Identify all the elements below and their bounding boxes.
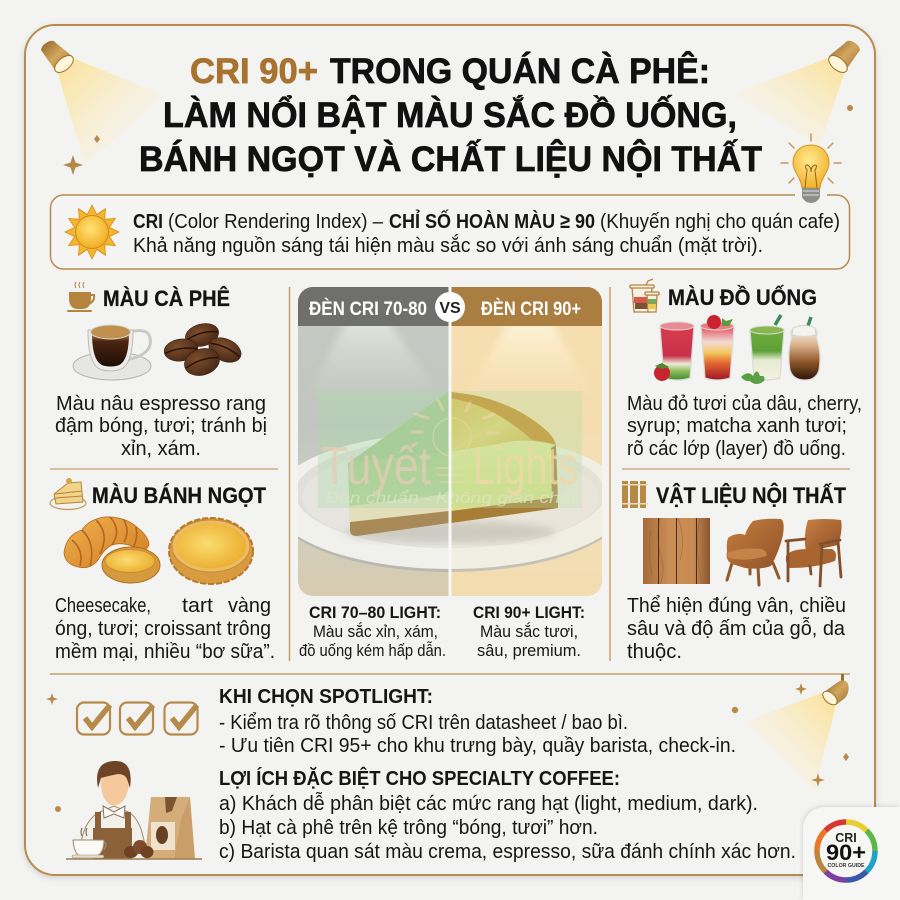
text block: choosing a spotlight [219, 686, 736, 757]
icon: bottom-left sparkles [46, 693, 61, 812]
icon: espresso cup [73, 325, 151, 380]
icon: small egg tart [102, 547, 160, 583]
icon: top-left sparkles [63, 135, 100, 175]
comparison image: Tuyết [321, 436, 431, 496]
VS badge: VS [439, 300, 461, 317]
pastry description [55, 594, 275, 663]
drink description: Màu đỏ tươi của dâu, cherry, [627, 392, 862, 415]
coffee description: xỉn, xám. [121, 437, 201, 460]
text block: choosing a spotlight: - Ưu tiên CRI 95+ cho khu trưng bày, quầy barista, check-in. [219, 735, 736, 757]
coffee description [55, 392, 267, 460]
CRI definition text: (Khuyến nghị cho quán cafe) [600, 210, 840, 233]
CRI definition text: Khả năng nguồn sáng tái hiện màu sắc so với ánh sáng chuẩn (mặt trời). [133, 234, 763, 257]
heading: interior materials: VẬT LIỆU NỘI THẤT [656, 483, 847, 508]
interior description: thuộc. [627, 640, 682, 663]
icon: croissant [64, 517, 149, 568]
icon: wood panel [643, 518, 710, 584]
panel: coffee colour [55, 282, 267, 460]
icon: large egg tart [169, 518, 253, 584]
title: CRI 90+ [190, 52, 318, 91]
caption: CRI 90+ [473, 604, 585, 660]
title [139, 51, 762, 179]
icon: small cake slice [50, 478, 86, 510]
label: CRI 70-80 lamp: ĐÈN CRI 70-80 [309, 298, 427, 320]
icon: three checkboxes [77, 702, 198, 734]
icon: leather armchair [727, 519, 784, 585]
drink description [627, 392, 862, 460]
title: BÁNH NGỌT VÀ CHẤT LIỆU NỘI THẤT [139, 139, 762, 179]
badge: CRI 90+ colour guide [803, 807, 900, 900]
comparison image: Đèn chuẩn - Không gian chất [325, 489, 577, 507]
interior description: Thể hiện đúng vân, chiều [627, 594, 846, 617]
panel: cheesecake comparison [298, 287, 602, 660]
CRI definition text: CRI [133, 210, 163, 233]
icon: bottom-right spotlight [745, 674, 849, 790]
icon: coffee beans [163, 320, 245, 380]
icon: layered drinks [654, 315, 820, 384]
badge: CRI 90+ colour guide: CRI [835, 831, 857, 845]
pastry description: vàng [228, 594, 271, 617]
icon: decorative dot top-right [847, 105, 853, 111]
text block: choosing a spotlight: - Kiểm tra rõ thông số CRI trên datasheet / bao bì. [219, 712, 628, 734]
caption: CRI 90+: Màu sắc tươi, [480, 622, 578, 641]
icon: light bulb [781, 134, 841, 203]
CRI definition text: CHỈ SỐ HOÀN MÀU ≥ 90 [389, 209, 595, 233]
heading: pastry colour: MÀU BÁNH NGỌT [92, 483, 267, 508]
icon: small wood planks [622, 481, 648, 508]
caption: CRI 70-80: đồ uống kém hấp dẫn. [299, 641, 446, 660]
comparison image [298, 287, 602, 596]
label: CRI 90+ lamp: ĐÈN CRI 90+ [481, 298, 581, 320]
pastry description: tart [182, 594, 213, 617]
pastry description: óng, tươi; croissant trông [55, 617, 271, 640]
CRI definition text [133, 209, 840, 257]
interior description: sâu và độ ấm của gỗ, da [627, 617, 846, 640]
VS badge [435, 292, 465, 322]
caption: CRI 70-80: CRI 70–80 LIGHT: [309, 604, 441, 622]
text block: specialty coffee benefits [219, 766, 796, 863]
text block: choosing a spotlight: KHI CHỌN SPOTLIGHT: [219, 686, 433, 708]
badge: CRI 90+ colour guide: COLOR GUIDE [828, 863, 865, 869]
icon: sun [65, 205, 119, 259]
pastry description: mềm mại, nhiều “bơ sữa”. [55, 640, 275, 663]
text block: specialty coffee benefits: b) Hạt cà phê trên kệ trông “bóng, tươi” hơn. [219, 817, 598, 839]
title: LÀM NỔI BẬT MÀU SẮC ĐỒ UỐNG, [163, 95, 737, 135]
caption: CRI 90+: sâu, premium. [477, 642, 581, 660]
title: TRONG QUÁN CÀ PHÊ: [330, 51, 710, 91]
panel: pastry colour [50, 478, 275, 663]
heading: coffee colour: MÀU CÀ PHÊ [103, 286, 230, 311]
pastry description: Cheesecake, [55, 594, 151, 617]
comparison image: Lights [473, 436, 578, 496]
panel: CRI definition [50, 195, 850, 269]
heading: drink colour: MÀU ĐỒ UỐNG [668, 284, 817, 310]
drink description: syrup; matcha xanh tươi; [627, 414, 847, 437]
icon: wooden-arm chair [786, 519, 842, 586]
badge: CRI 90+ colour guide: 90+ [826, 840, 866, 865]
icon: small coffee cup [67, 282, 94, 312]
interior description [627, 594, 846, 663]
panel: drink colour [627, 279, 862, 460]
CRI definition text: (Color Rendering Index) – [168, 210, 384, 233]
caption: CRI 70-80 [299, 604, 446, 660]
icon: small drink cups [630, 279, 659, 312]
drink description: rõ các lớp (layer) đồ uống. [627, 437, 846, 460]
icon: barista with coffee bag [66, 761, 202, 859]
text block: specialty coffee benefits: c) Barista quan sát màu crema, espresso, sữa đánh chính xác hơn. [219, 841, 796, 863]
coffee description: Màu nâu espresso rang [56, 392, 266, 415]
text block: specialty coffee benefits: LỢI ÍCH ĐẶC BIỆT CHO SPECIALTY COFFEE: [219, 766, 620, 790]
coffee description: đậm bóng, tươi; tránh bị [55, 414, 267, 437]
text block: specialty coffee benefits: a) Khách dễ phân biệt các mức rang hạt (light, medium, dark). [219, 792, 758, 815]
icon: bottom-right sparkles [732, 683, 849, 787]
icon: top-right spotlight [730, 41, 860, 145]
caption: CRI 90+: CRI 90+ LIGHT: [473, 604, 585, 622]
icon: top-left spotlight [41, 41, 165, 165]
panel: interior materials [622, 481, 847, 663]
caption: CRI 70-80: Màu sắc xỉn, xám, [313, 622, 438, 641]
